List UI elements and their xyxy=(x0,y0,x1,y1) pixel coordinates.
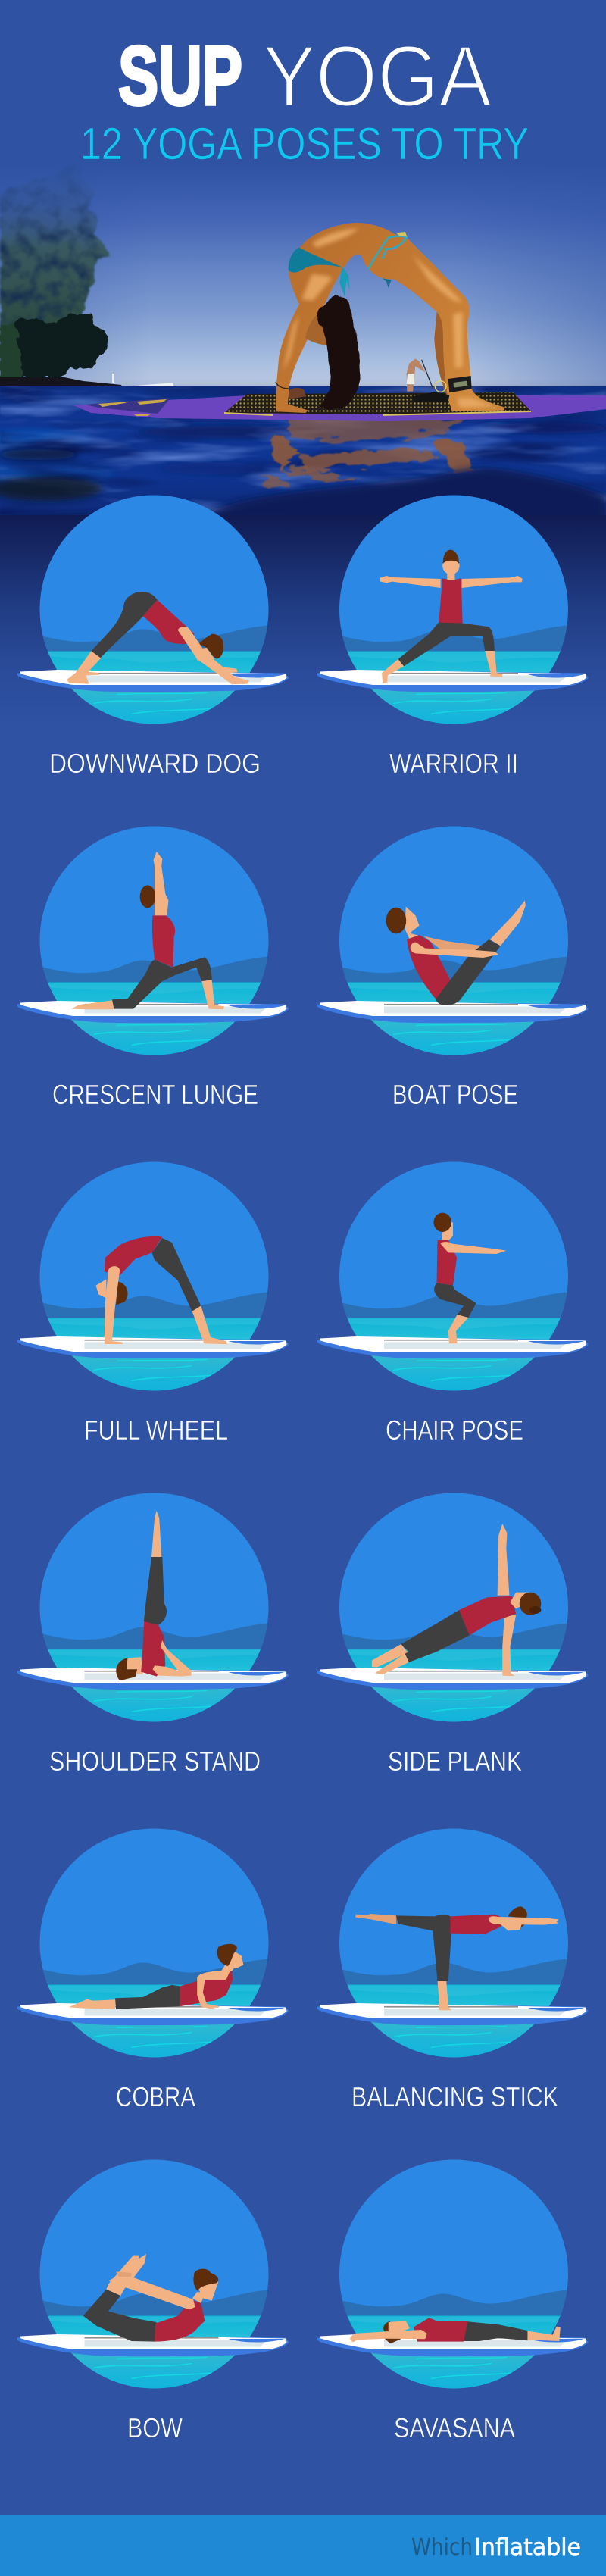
pose card: side plank xyxy=(317,1493,589,1777)
scene: sky circle, water, board xyxy=(317,496,589,724)
figure: warrior II xyxy=(380,550,523,683)
figure: cobra xyxy=(69,1944,243,2009)
scene: sky circle, water, board xyxy=(317,826,589,1055)
pose card: savasana xyxy=(317,2159,589,2443)
face xyxy=(305,311,330,345)
figure: downward dog xyxy=(67,592,249,684)
figure: bow xyxy=(83,2254,218,2342)
title: SUP xyxy=(118,30,242,123)
label: BOW xyxy=(127,2412,183,2443)
title xyxy=(118,29,492,125)
body xyxy=(276,223,504,413)
dark swell in the foreground xyxy=(0,467,606,523)
label: CHAIR POSE xyxy=(386,1415,523,1446)
far leg xyxy=(434,312,460,399)
figure: boat pose xyxy=(386,900,526,1005)
pose card: cobra xyxy=(17,1829,289,2112)
title: YOGA xyxy=(263,29,492,125)
pose card: full wheel xyxy=(17,1162,289,1446)
scene: sky circle, water, board xyxy=(17,2159,289,2388)
figure: chair pose xyxy=(433,1213,506,1343)
scene: sky circle, water, board xyxy=(317,1493,589,1721)
far hand xyxy=(286,388,305,399)
pose card: downward dog xyxy=(17,496,289,779)
traction mat xyxy=(224,392,531,414)
dark bush and shoreline xyxy=(0,314,174,391)
footer bar with logo xyxy=(0,2515,606,2576)
dark reflection of the shore xyxy=(0,449,102,501)
scene: sky circle, water, board xyxy=(17,1493,289,1721)
bikini top xyxy=(289,248,343,273)
sunlit skin highlights xyxy=(283,229,495,408)
scene: sky circle, water, board xyxy=(317,1162,589,1391)
figure: shoulder stand xyxy=(116,1511,192,1680)
ankle leash xyxy=(448,376,472,392)
pose card: chair pose xyxy=(317,1162,589,1446)
figure: full wheel xyxy=(96,1236,227,1344)
logo: WhichInflatable: Which xyxy=(411,2534,473,2561)
hero photo: woman in full wheel on paddle board xyxy=(0,0,606,523)
figure: side plank xyxy=(372,1524,541,1676)
figure: savasana xyxy=(350,2318,561,2343)
bracelet xyxy=(276,382,289,389)
scene: sky circle, water, board xyxy=(17,1829,289,2058)
water xyxy=(0,386,606,515)
distant paddler xyxy=(407,358,426,392)
label: CRESCENT LUNGE xyxy=(52,1079,258,1110)
sky xyxy=(0,0,606,390)
figure: crescent lunge xyxy=(71,852,224,1009)
paddle board xyxy=(73,395,606,421)
pose card: bow xyxy=(17,2159,289,2443)
pose card: balancing stick xyxy=(317,1829,589,2112)
label: SHOULDER STAND xyxy=(49,1746,261,1777)
scene: sky circle, water, board xyxy=(17,826,289,1055)
logo: WhichInflatable xyxy=(411,2534,581,2561)
label: BALANCING STICK xyxy=(351,2081,558,2112)
scene: sky circle, water, board xyxy=(17,1162,289,1391)
label: WARRIOR II xyxy=(389,748,518,779)
scene: sky circle, water, board xyxy=(17,496,289,724)
bikini bottom ties xyxy=(368,236,407,269)
pose card: shoulder stand xyxy=(17,1493,289,1777)
woman, drawn at 3x xyxy=(276,223,504,413)
logo: WhichInflatable: Inflatable xyxy=(474,2534,581,2561)
label: COBRA xyxy=(116,2081,195,2112)
scene: sky circle, water, board xyxy=(317,2159,589,2388)
pose card: boat pose xyxy=(317,826,589,1110)
subtitle: 12 YOGA POSES TO TRY xyxy=(80,119,529,169)
pose card: warrior II xyxy=(317,496,589,779)
orange reflection of the yogi xyxy=(259,414,473,486)
feathery tree xyxy=(0,163,108,379)
pose card: crescent lunge xyxy=(17,826,289,1110)
scene: sky circle, water, board xyxy=(317,1829,589,2058)
label: SIDE PLANK xyxy=(388,1746,522,1777)
label: SAVASANA xyxy=(394,2412,515,2443)
fade from water into page background xyxy=(0,515,606,727)
label: FULL WHEEL xyxy=(84,1415,228,1446)
long dark hair xyxy=(319,297,361,408)
label: DOWNWARD DOG xyxy=(49,748,261,779)
figure: balancing stick xyxy=(355,1906,558,2010)
label: BOAT POSE xyxy=(392,1079,518,1110)
